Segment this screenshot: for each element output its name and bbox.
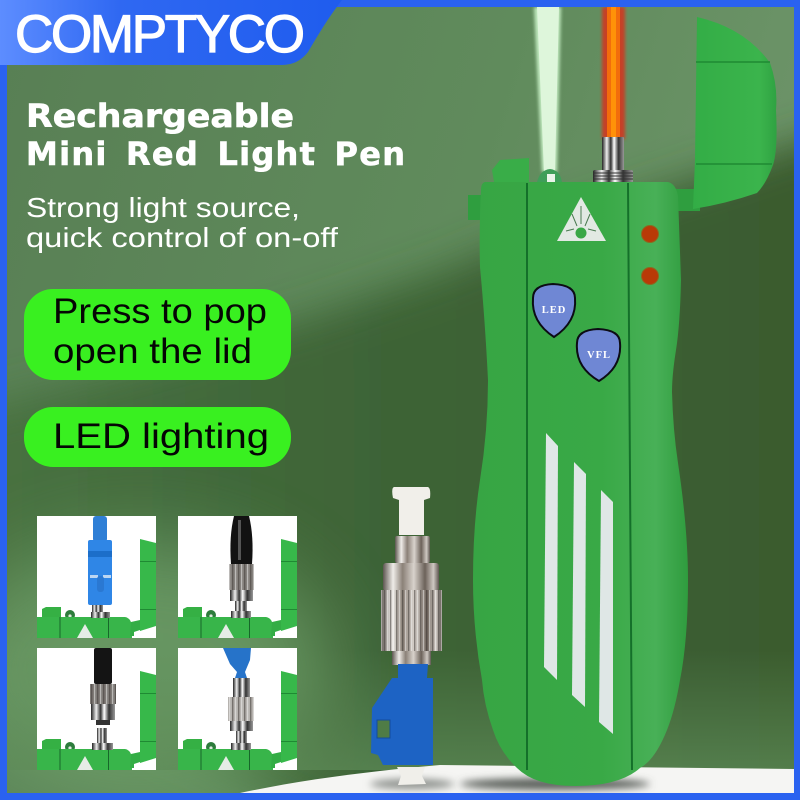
thumbnail: SC connector xyxy=(37,516,156,638)
thumbnail: ST connector xyxy=(178,516,297,638)
body xyxy=(473,182,688,786)
pen xyxy=(460,7,777,790)
button: LED xyxy=(533,284,575,337)
callout: LED lighting xyxy=(24,407,291,467)
floor shadow xyxy=(460,778,650,790)
callout: press to pop open the lid: open the lid xyxy=(53,331,252,371)
floor xyxy=(240,765,794,793)
blue LC body xyxy=(371,664,433,765)
button: VFL: VFL xyxy=(587,350,611,361)
top tab xyxy=(492,158,529,182)
side tab xyxy=(468,195,484,220)
indicator leds xyxy=(642,226,658,284)
callout: press to pop open the lid xyxy=(24,289,291,380)
thumbnail: FC connector xyxy=(37,648,156,770)
title: Rechargeable xyxy=(26,97,294,135)
connector adapter xyxy=(371,487,442,785)
button: VFL xyxy=(577,329,620,381)
brand name: COMPTYCO xyxy=(15,5,305,64)
metal ferrule xyxy=(593,137,633,183)
subtitle: quick control of on-off xyxy=(26,222,338,253)
red laser xyxy=(602,7,625,139)
subtitle xyxy=(26,192,338,253)
connector floor shadow xyxy=(370,779,454,789)
title: Mini Red Light Pen xyxy=(26,135,405,173)
white dust cap xyxy=(392,487,430,535)
subtitle: Strong light source, xyxy=(26,192,300,223)
led dome xyxy=(537,169,562,182)
grooves xyxy=(527,183,632,770)
title xyxy=(26,97,405,173)
lid xyxy=(675,17,777,211)
logo banner xyxy=(0,0,342,65)
laser warning triangle xyxy=(557,197,606,241)
callout: LED lighting: LED lighting xyxy=(53,416,269,456)
light beam xyxy=(534,7,561,172)
button: LED: LED xyxy=(542,305,566,316)
thumbnail: LC connector xyxy=(178,648,297,770)
white stripes xyxy=(544,433,613,734)
callout: press to pop open the lid: Press to pop xyxy=(53,291,267,331)
